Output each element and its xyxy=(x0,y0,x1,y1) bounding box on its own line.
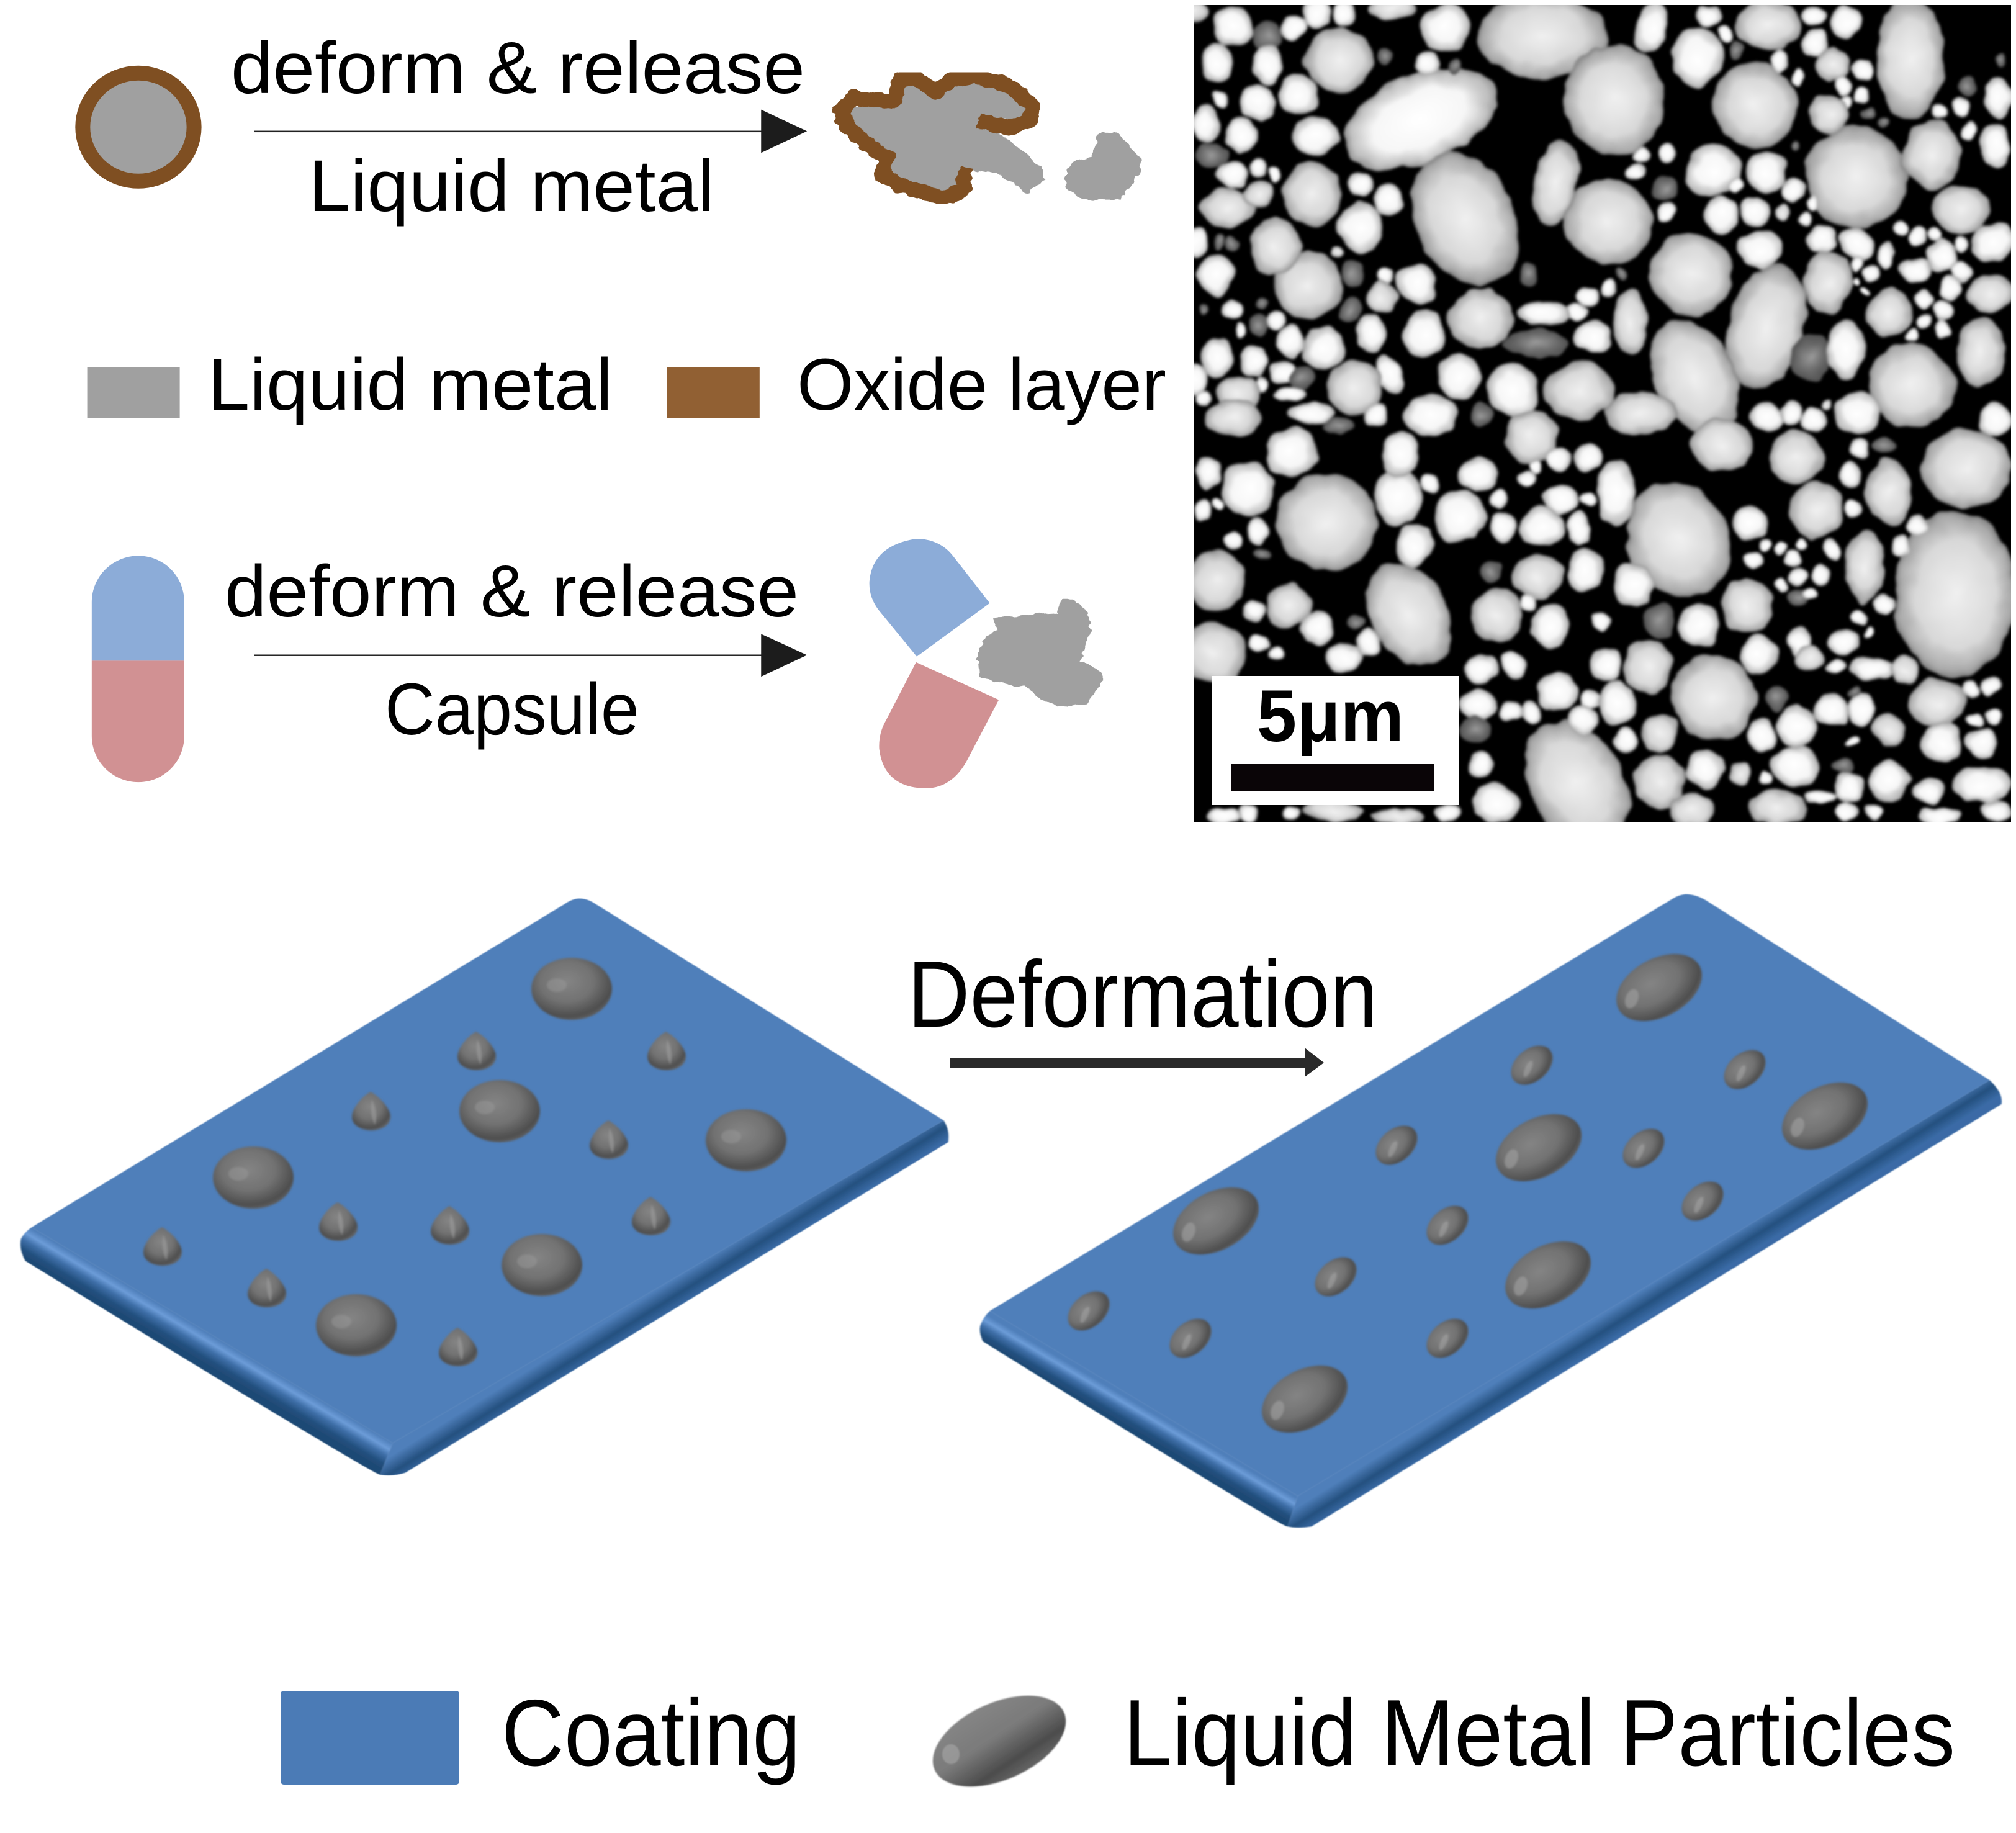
icon: intact capsule xyxy=(92,556,184,782)
coating plate side faces and top surface xyxy=(20,899,948,1475)
icon: ruptured capsule releasing contents xyxy=(870,539,1102,788)
particles: stretched liquid metal xyxy=(1060,940,1879,1446)
legend swatch: oxide layer xyxy=(667,367,760,418)
text: liquid metal caption: Liquid metal xyxy=(308,145,714,227)
icon: intact liquid metal particle with oxide shell xyxy=(83,73,194,181)
arrow: deformation direction xyxy=(950,1048,1324,1077)
heading: deformation: Deformation xyxy=(907,942,1378,1047)
panel: liquid metal schematic xyxy=(83,73,1141,788)
legend swatch: coating xyxy=(281,1691,459,1785)
particles: spherical liquid metal xyxy=(143,958,786,1366)
legend label: coating: Coating xyxy=(502,1680,801,1786)
panel: coating before deformation xyxy=(20,899,948,1475)
legend swatch: liquid metal xyxy=(88,367,180,418)
scale bar: 5 micrometres: 5μm xyxy=(1257,675,1404,757)
text: deform and release, capsule: deform & release xyxy=(225,551,799,633)
text: capsule caption: Capsule xyxy=(385,669,639,750)
legend label: liquid metal: Liquid metal xyxy=(208,344,613,426)
legend icon: liquid metal particle xyxy=(919,1677,1079,1805)
panel: coating after deformation xyxy=(980,894,2002,1528)
arrow: capsule deformation xyxy=(254,634,807,677)
text: deform and release, top: deform & release xyxy=(231,27,805,109)
scale bar: 5 micrometres xyxy=(1212,675,1459,805)
icon: ruptured liquid metal with released droplet xyxy=(841,76,1141,200)
legend label: liquid metal particles: Liquid Metal Particles xyxy=(1123,1680,1955,1786)
stretched coating plate xyxy=(980,894,2002,1528)
legend label: oxide layer: Oxide layer xyxy=(797,344,1166,426)
arrow: liquid metal deformation xyxy=(254,110,807,153)
panel: SEM micrograph of particles xyxy=(1182,0,2016,865)
